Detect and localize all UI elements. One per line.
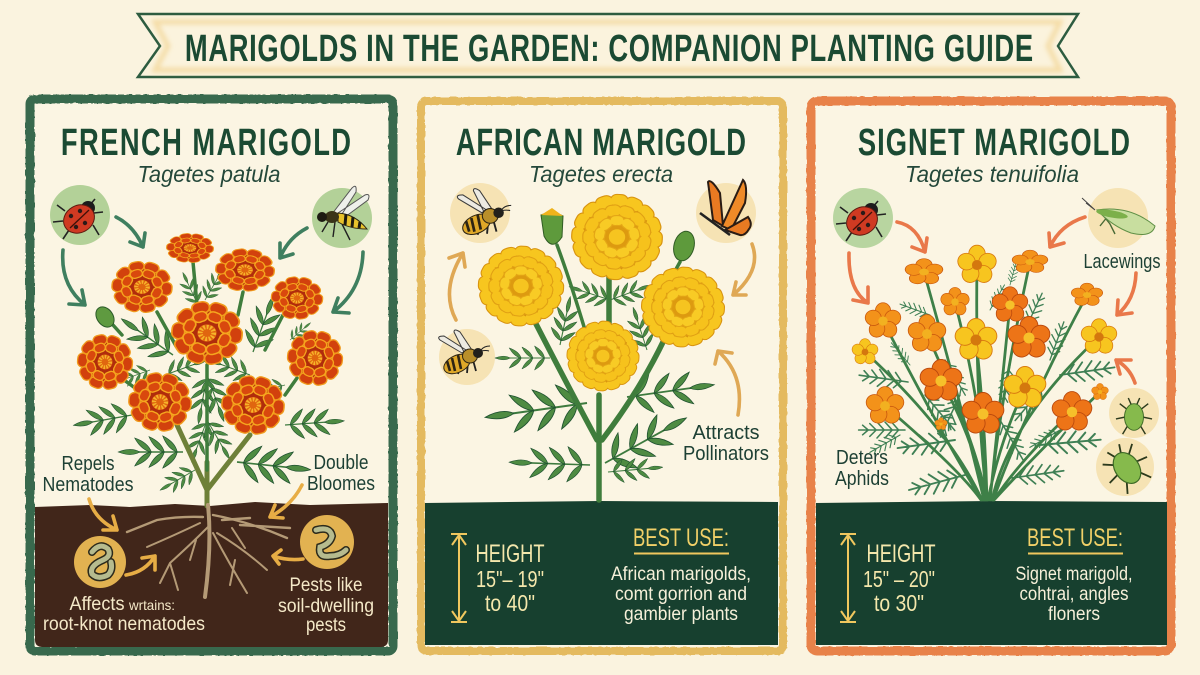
- label: repels nematodes: Nematodes: [42, 474, 134, 496]
- plant: French marigold: [71, 235, 345, 506]
- flowers: [574, 196, 660, 278]
- icon: aphid lower: [1095, 435, 1158, 499]
- icon: butterfly: [696, 180, 756, 243]
- caption: soil pests: pests: [306, 614, 346, 636]
- bud: [92, 303, 118, 331]
- icon: nematode right: [300, 515, 354, 569]
- icon: ladybug: [50, 185, 110, 245]
- label: deters aphids: Aphids: [835, 468, 889, 490]
- caption: affects nematodes: [43, 593, 205, 635]
- label: attracts pollinators: [683, 422, 769, 465]
- height info: [840, 534, 936, 622]
- plant: African marigold: [480, 196, 723, 500]
- label: attracts pollinators: Pollinators: [683, 443, 769, 465]
- leaves: [71, 399, 135, 441]
- label: deters aphids: [835, 447, 889, 490]
- panel background and border: [811, 101, 1171, 651]
- flowers: [170, 235, 210, 261]
- best use: floners: [1048, 604, 1100, 625]
- height info: to 40": [485, 590, 535, 616]
- panel background and border: [30, 99, 393, 651]
- panel: African marigold: [421, 101, 783, 651]
- stems: [177, 425, 250, 506]
- feathery foliage: [858, 367, 909, 390]
- icon: wasp: [312, 186, 372, 248]
- caption: affects nematodes: Affects: [70, 593, 125, 615]
- label: repels nematodes: [42, 453, 134, 496]
- panel: Signet marigold: [811, 101, 1171, 651]
- best use: comt gorrion and: [615, 584, 747, 605]
- caption: soil pests: [278, 574, 374, 636]
- arrows: beneficial insects: [63, 217, 363, 313]
- best use: African marigolds,: [611, 564, 751, 585]
- label: deters aphids: Deters: [836, 447, 888, 469]
- buds: [541, 211, 563, 244]
- icon: nematode left: [74, 536, 126, 588]
- height info: HEIGHT: [476, 540, 544, 568]
- scientific name: Tagetes patula: [138, 161, 280, 187]
- heading: AFRICAN MARIGOLD: [456, 122, 746, 164]
- best use: BEST USE:: [633, 524, 729, 552]
- label: attracts pollinators: Attracts: [692, 422, 760, 444]
- heading: FRENCH MARIGOLD: [61, 122, 351, 164]
- icon: lacewing: [1082, 188, 1155, 248]
- stems: [535, 275, 664, 500]
- arrows: soil: [89, 485, 303, 575]
- best use: cohtrai, angles: [1020, 584, 1128, 605]
- leaves: [482, 379, 590, 441]
- heading: SIGNET MARIGOLD: [858, 122, 1130, 164]
- icon: bee lower: [439, 329, 495, 385]
- caption: soil pests: soil-dwelling: [278, 595, 374, 617]
- height info: 15"– 19": [476, 566, 544, 592]
- icon: bee top: [450, 183, 511, 243]
- info band: [425, 501, 778, 645]
- height info: HEIGHT: [866, 540, 936, 568]
- arrows: insects: [849, 217, 1136, 383]
- caption: affects nematodes: root-knot nematodes: [43, 613, 205, 635]
- label: lacewings: Lacewings: [1084, 251, 1160, 273]
- title banner: [138, 14, 1078, 77]
- panel background and border: [421, 101, 783, 651]
- title banner: MARIGOLDS IN THE GARDEN: COMPANION PLANTING GUIDE: [185, 28, 1033, 70]
- best use: BEST USE:: [1027, 524, 1123, 552]
- arrows: pollinators: [449, 244, 755, 415]
- scientific name: Tagetes erecta: [529, 161, 673, 187]
- scientific name: Tagetes tenuifolia: [905, 161, 1079, 187]
- label: repels nematodes: Repels: [62, 453, 114, 475]
- label: double blooms: [307, 452, 375, 495]
- caption: soil pests: Pests like: [290, 574, 362, 596]
- label: double blooms: Double: [314, 452, 368, 474]
- height info: 15" – 20": [863, 566, 935, 592]
- flowers: [956, 245, 998, 286]
- icon: ladybug: [833, 188, 893, 248]
- best use: [1016, 524, 1132, 625]
- label: double blooms: Bloomes: [307, 473, 375, 495]
- height info: [451, 534, 544, 622]
- soil: [35, 502, 388, 647]
- best use: Signet marigold,: [1016, 564, 1132, 585]
- best use: gambier plants: [624, 604, 738, 625]
- caption: affects nematodes: wrtains:: [128, 597, 175, 613]
- height info: to 30": [874, 590, 924, 616]
- stems: [865, 262, 1100, 500]
- info band: [816, 501, 1167, 645]
- plant: Signet marigold: [851, 245, 1119, 500]
- icon: aphid upper: [1109, 388, 1159, 438]
- roots: [127, 505, 290, 597]
- panel: French marigold: [30, 99, 393, 651]
- best use: [611, 524, 751, 625]
